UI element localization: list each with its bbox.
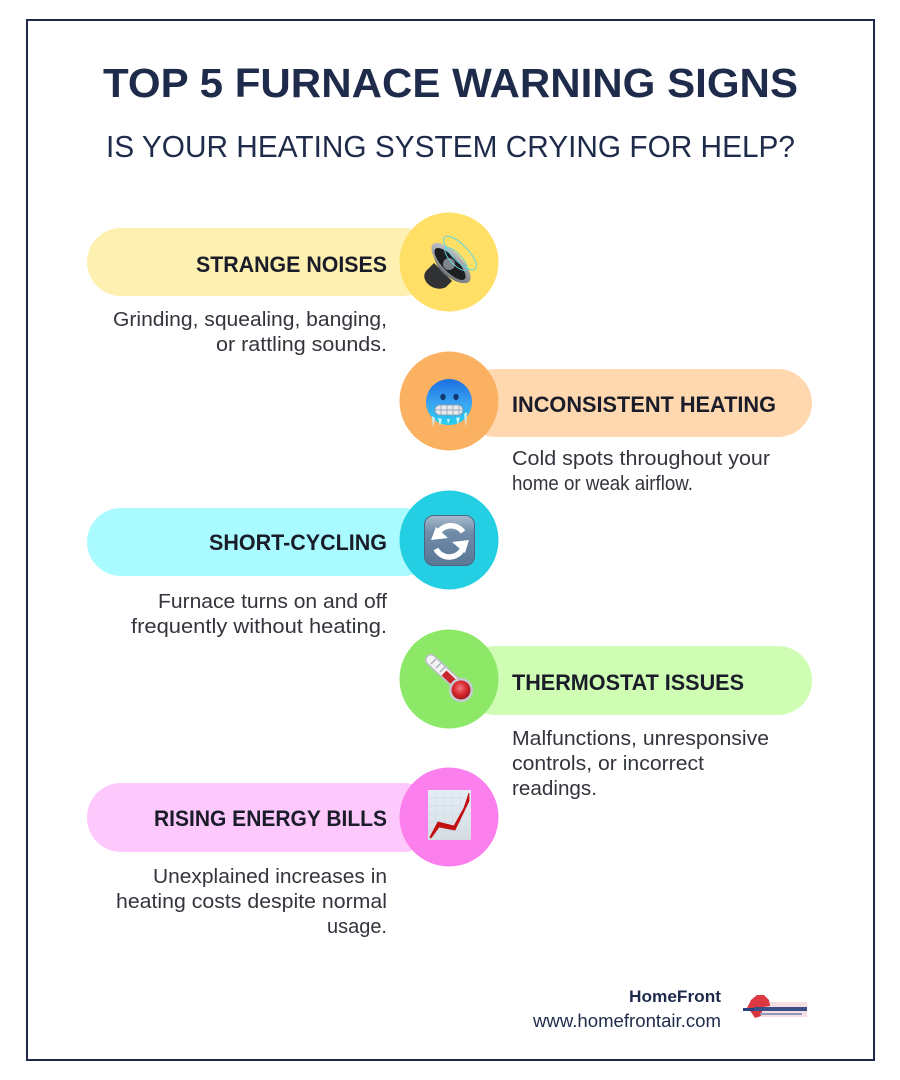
icon: freezing face <box>426 379 472 427</box>
footer brand name: HomeFront <box>629 987 721 1006</box>
icon circle: pink <box>400 768 498 866</box>
label pill: thermostat issues <box>462 646 812 715</box>
description: short-cycling: Furnace turns on and off <box>158 590 387 613</box>
description: inconsistent heating <box>512 447 770 495</box>
icon circle: green <box>400 630 498 728</box>
description: strange noises <box>113 308 387 356</box>
panel: thermostat issues <box>400 630 812 728</box>
description: rising energy bills <box>116 865 387 938</box>
heading: strange noises: STRANGE NOISES <box>196 252 387 277</box>
heading: inconsistent heating: INCONSISTENT HEATING <box>512 392 776 417</box>
description: strange noises: or rattling sounds. <box>216 333 387 356</box>
description: thermostat issues: controls, or incorrect <box>512 752 704 775</box>
panel: inconsistent heating <box>400 352 812 450</box>
icon circle: cyan <box>400 490 498 590</box>
description: inconsistent heating: home or weak airflow. <box>512 472 693 495</box>
icon: thermometer <box>431 659 473 702</box>
icon: refresh arrows <box>424 516 474 566</box>
label pill: inconsistent heating <box>462 369 812 437</box>
description: thermostat issues: readings. <box>512 777 597 800</box>
icon: speaker <box>424 232 481 289</box>
panel: rising energy bills <box>87 768 498 866</box>
heading: thermostat issues: THERMOSTAT ISSUES <box>512 670 744 695</box>
description: rising energy bills: usage. <box>327 915 387 938</box>
label pill: strange noises <box>87 228 437 296</box>
label pill: short-cycling <box>87 508 437 576</box>
description: rising energy bills: Unexplained increases in <box>153 865 387 888</box>
icon: HomeFront logo <box>743 995 807 1018</box>
icon: rising chart <box>428 790 471 840</box>
heading: short-cycling: SHORT-CYCLING <box>209 530 387 555</box>
icon circle: yellow <box>400 212 498 312</box>
description: short-cycling: frequently without heating. <box>131 615 387 638</box>
panel: short-cycling <box>87 490 498 590</box>
title: TOP 5 FURNACE WARNING SIGNS <box>103 60 798 106</box>
panel: strange noises <box>87 212 498 312</box>
description: thermostat issues: Malfunctions, unresponsive <box>512 727 769 750</box>
subtitle: IS YOUR HEATING SYSTEM CRYING FOR HELP? <box>106 129 795 164</box>
description: short-cycling <box>131 590 387 638</box>
label pill: rising energy bills <box>87 783 437 852</box>
description: thermostat issues <box>512 727 769 800</box>
description: strange noises: Grinding, squealing, banging, <box>113 308 387 331</box>
icon circle: orange <box>400 352 498 450</box>
footer website: www.homefrontair.com <box>532 1011 721 1031</box>
heading: rising energy bills: RISING ENERGY BILLS <box>154 806 387 831</box>
description: inconsistent heating: Cold spots throughout your <box>512 447 770 470</box>
description: rising energy bills: heating costs despite normal <box>116 890 387 913</box>
